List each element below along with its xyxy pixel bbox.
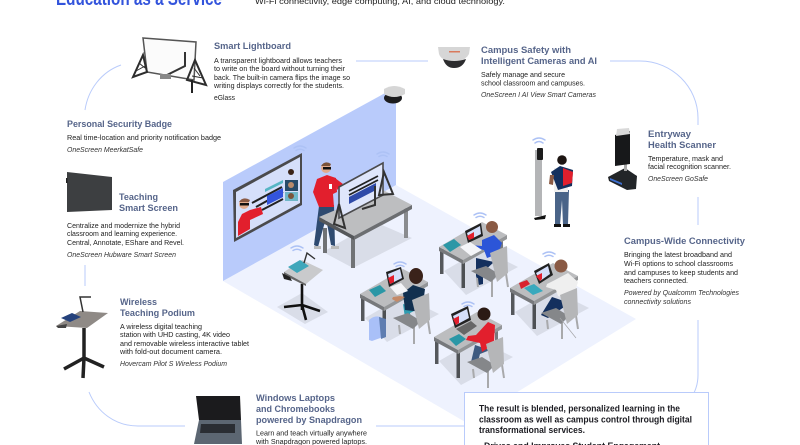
panel: campus safety	[438, 44, 597, 99]
panel: campus-wide connectivity: teachers connected.	[624, 278, 688, 285]
icon: health scanner	[608, 128, 637, 190]
callout: result box: The result is blended, personalized learning in the	[479, 404, 680, 414]
panel: campus safety: Safely manage and secure	[481, 72, 565, 79]
panel: entryway scanner	[608, 128, 731, 190]
panel: campus safety: school classroom and campuses.	[481, 80, 585, 88]
panel: smart lightboard: eGlass	[214, 95, 236, 102]
panel: smart lightboard	[133, 38, 350, 102]
teacher	[313, 162, 359, 249]
panel: smart lightboard: back. The built-in camera flips the image so	[214, 75, 350, 82]
panel: campus-wide connectivity: Campus-Wide Connectivity	[624, 235, 746, 246]
panel: wireless teaching podium: with fold-out document camera.	[119, 349, 222, 356]
panel: personal security badge: OneScreen MeerkatSafe	[67, 147, 143, 154]
panel: campus-wide connectivity: Powered by Qualcomm Technologies	[624, 290, 740, 297]
panel: wireless teaching podium: station with UHD casting, 4K video	[120, 332, 230, 339]
panel: smart lightboard: to write on the board without turning their	[214, 66, 346, 73]
icon: laptop	[194, 396, 242, 444]
panel: wireless teaching podium: Wireless	[120, 296, 157, 307]
icon: lightboard	[133, 38, 206, 93]
panel: entryway scanner: Health Scanner	[648, 139, 716, 150]
callout: result box	[464, 392, 708, 445]
panel: entryway scanner: Temperature, mask and	[648, 156, 723, 163]
panel: wireless teaching podium: A wireless digital teaching	[120, 324, 202, 331]
panel: campus-wide connectivity: and campuses to keep students and	[624, 270, 738, 277]
panel: campus-wide connectivity: Bringing the latest broadband and	[624, 252, 732, 259]
panel: entryway scanner: OneScreen GoSafe	[648, 176, 708, 183]
standing student at scanner	[533, 138, 573, 227]
panel: campus safety: OneScreen I AI View Smart Cameras	[481, 92, 597, 99]
panel: entryway scanner: facial recognition scanner.	[648, 164, 731, 171]
panel: campus-wide connectivity: Wi-Fi options to school classrooms	[624, 261, 734, 268]
callout: result box: classroom as well as campus control through digital	[479, 414, 692, 424]
student desk: top	[439, 213, 518, 297]
panel: teaching smart screen: classroom and learning experience.	[67, 231, 177, 238]
panel: smart lightboard: A transparent lightboard allows teachers	[214, 58, 343, 65]
panel: smart lightboard: Smart Lightboard	[214, 40, 291, 51]
panel: teaching smart screen: Central, Annotate, EShare and Revel.	[67, 240, 184, 247]
wall smart screen	[233, 153, 302, 242]
panel: wireless teaching podium	[56, 296, 249, 378]
panel: laptops: Learn and teach virtually anywhere	[256, 430, 367, 438]
student desk: woman	[360, 262, 439, 344]
lightboard on table	[334, 163, 393, 228]
panel: laptops: Windows Laptops	[256, 392, 335, 403]
connector lines	[85, 61, 698, 426]
floor	[223, 185, 636, 423]
teacher table shadow	[323, 222, 412, 268]
teacher table	[319, 190, 412, 268]
ceiling camera	[384, 86, 405, 104]
panel: entryway scanner: Entryway	[648, 128, 692, 139]
panel: teaching smart screen: Teaching	[119, 191, 158, 202]
panel: campus-wide connectivity	[624, 235, 746, 306]
panel: teaching smart screen: Centralize and modernize the hybrid	[67, 223, 180, 230]
wifi: screen and board	[291, 146, 389, 250]
podium on floor	[277, 253, 328, 324]
panel: campus-wide connectivity: connectivity solutions	[624, 299, 692, 306]
student desk: red sweater	[434, 302, 513, 388]
panel: teaching smart screen	[66, 172, 184, 259]
panel: campus safety: Intelligent Cameras and AI	[481, 55, 597, 66]
classroom illustration	[223, 86, 636, 423]
panel: laptops	[194, 392, 367, 445]
panel: personal security badge	[67, 118, 221, 154]
panel: wireless teaching podium: and removable wireless interactive tablet	[120, 341, 249, 348]
panel: personal security badge: Real time-location and priority notification badge	[67, 135, 221, 142]
panel: personal security badge: Personal Security Badge	[67, 118, 172, 129]
icon: podium	[56, 297, 108, 378]
panel: wireless teaching podium: Teaching Podium	[120, 307, 195, 318]
icon: dome camera	[438, 47, 470, 68]
panel: campus safety: Campus Safety with	[481, 44, 571, 55]
panel: smart lightboard: writing displays correctly for the students.	[213, 83, 344, 90]
panel: wireless teaching podium: Hovercam Pilot S Wireless Podium	[120, 361, 227, 368]
student backpack	[369, 316, 386, 341]
student desk: white shirt	[510, 252, 589, 339]
icon: smart screen	[66, 172, 112, 212]
panel: laptops: and Chromebooks	[256, 403, 335, 414]
panel: teaching smart screen: OneScreen Hubware Smart Screen	[67, 252, 176, 259]
wall	[223, 87, 396, 281]
panel: teaching smart screen: Smart Screen	[119, 202, 178, 213]
panel: laptops: powered by Snapdragon	[256, 414, 362, 425]
callout: result box: transformational services.	[479, 425, 585, 435]
